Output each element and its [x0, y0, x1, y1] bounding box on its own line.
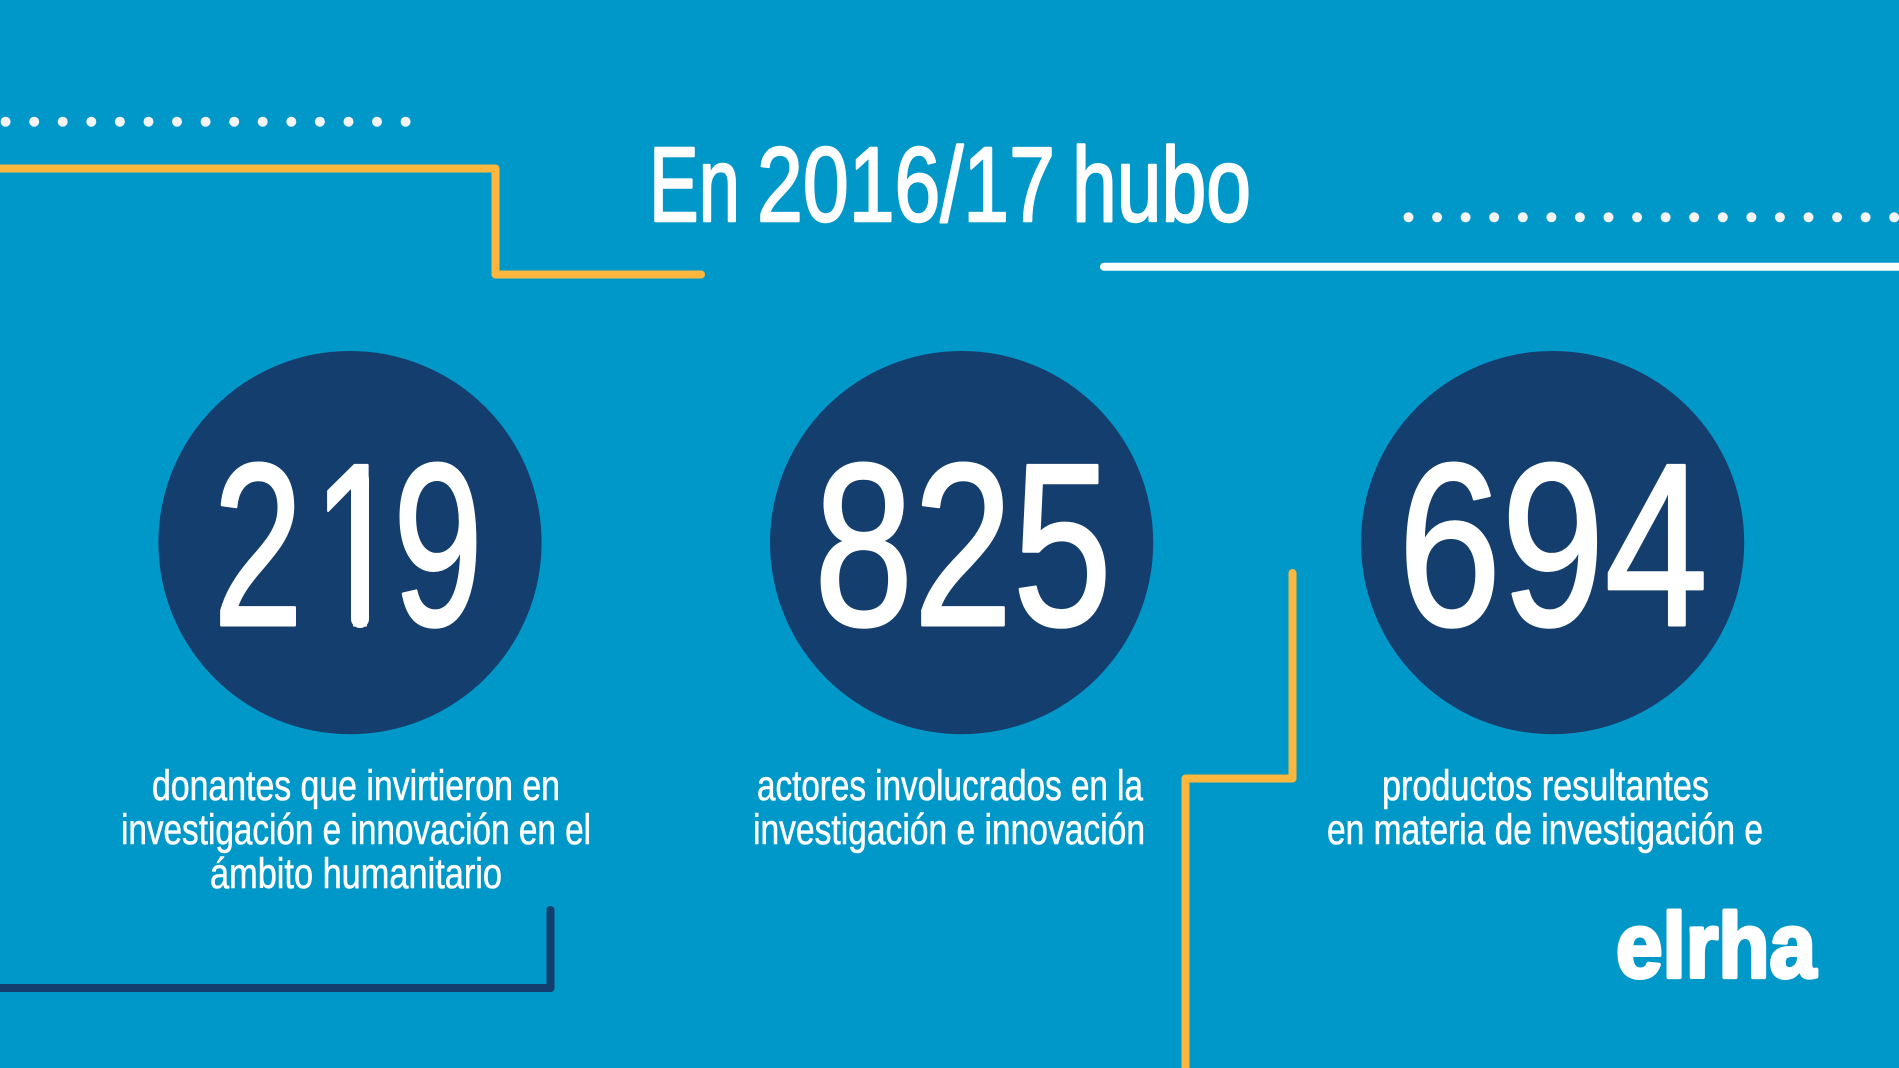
caption: products: productos resultantes [1382, 762, 1709, 810]
number 825: 825 [814, 416, 1112, 675]
logo: elrha: elrha [1616, 895, 1817, 997]
caption: products [1327, 762, 1763, 854]
stat circle: 219 [158, 351, 542, 734]
stat circle: 825 [770, 351, 1153, 734]
navy stepped line bottom-left [0, 910, 550, 988]
title: 2016/17 [757, 126, 1055, 244]
caption: donors: ámbito humanitario [210, 850, 502, 898]
caption: donors [121, 762, 591, 898]
caption: donors: donantes que invirtieron en [152, 762, 560, 810]
stat circle: 694 [1361, 351, 1744, 734]
yellow stepped line top-left [0, 168, 701, 274]
title: hubo [1072, 126, 1251, 244]
title: En [649, 126, 740, 244]
white line top-right [1104, 263, 1899, 271]
caption: products: en materia de investigación e [1327, 806, 1763, 854]
number 694: 694 [1398, 416, 1708, 675]
number 219: 219 [213, 416, 483, 675]
caption: actors: actores involucrados en la [757, 762, 1143, 810]
yellow stepped line bottom-right [1186, 573, 1292, 1068]
top-left dotted line [1, 117, 411, 127]
caption: actors [753, 762, 1145, 854]
top-right dotted line [1404, 212, 1899, 222]
caption: donors: investigación e innovación en el [121, 806, 591, 854]
caption: actors: investigación e innovación [753, 806, 1145, 854]
title [649, 126, 1251, 244]
